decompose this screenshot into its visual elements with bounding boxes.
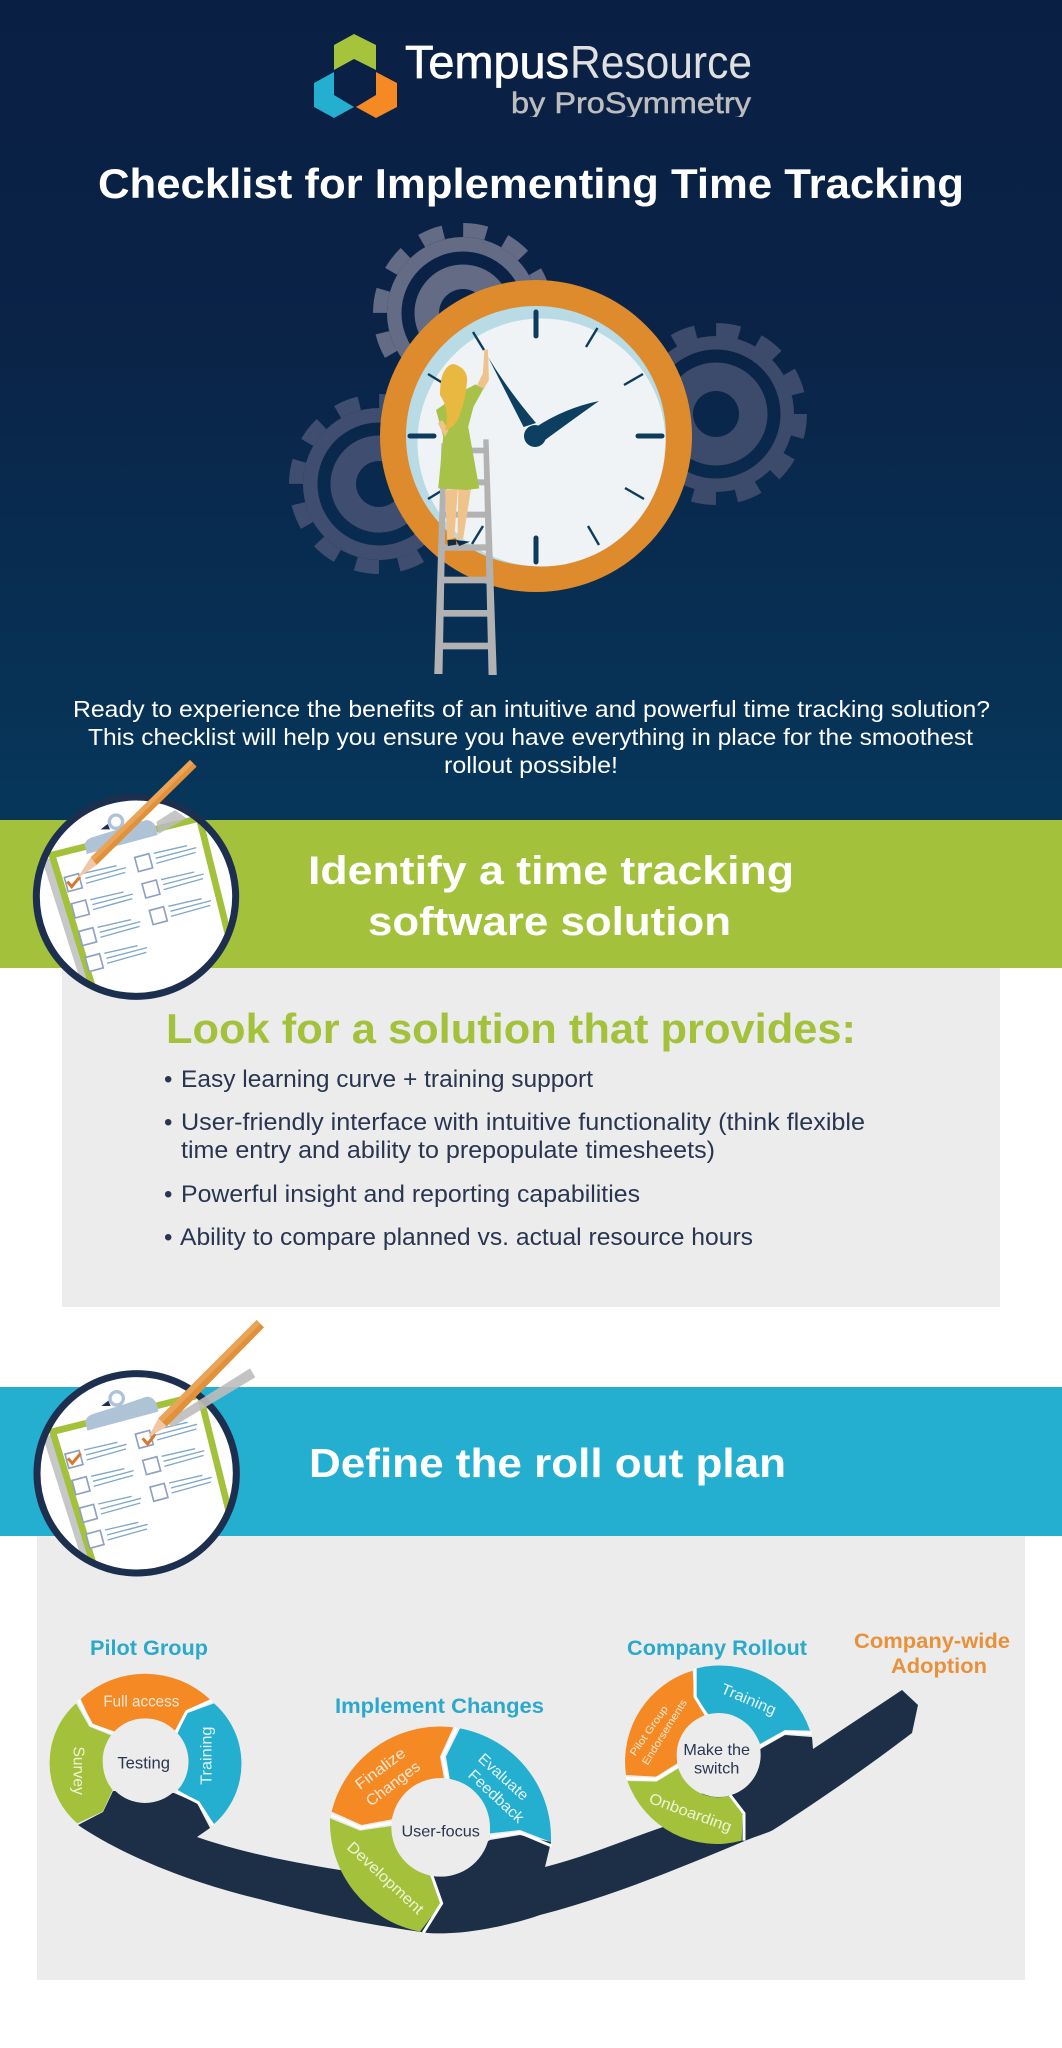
bullet list: User-friendly interface with intuitive functionality (think flexible xyxy=(181,1109,865,1136)
gear: right xyxy=(632,330,800,498)
stage: pilot group xyxy=(50,1637,241,1825)
woman xyxy=(436,349,489,546)
bullet list: time entry and ability to prepopulate timesheets) xyxy=(181,1137,715,1164)
bullet list: Easy learning curve + training support xyxy=(181,1066,593,1093)
ring: Changes xyxy=(363,1758,424,1810)
header background xyxy=(0,0,1062,820)
band heading: Define the roll out plan xyxy=(309,1440,786,1486)
stage title: Pilot Group xyxy=(90,1637,208,1660)
ring: Finalize xyxy=(352,1745,409,1793)
bullet list: • xyxy=(164,1181,172,1208)
band heading: Identify a time tracking xyxy=(308,849,794,893)
icon: clipboard with pencil 1 xyxy=(36,760,253,1063)
ring: Survey xyxy=(69,1746,86,1795)
title: Checklist for Implementing Time Tracking xyxy=(98,160,964,207)
stage title: Implement Changes xyxy=(335,1695,544,1718)
clock hour ticks xyxy=(410,312,662,562)
logo mark xyxy=(314,34,397,118)
clock xyxy=(380,280,692,592)
logo tagline: by ProSymmetry xyxy=(511,87,751,120)
logo wordmark: Tempus xyxy=(405,36,569,88)
gear: left xyxy=(296,401,462,567)
ring: Testing xyxy=(117,1754,170,1773)
ring: Development xyxy=(343,1839,427,1919)
ring: Training xyxy=(718,1681,779,1719)
bullet list: • xyxy=(164,1066,172,1093)
panel heading: Look for a solution that provides: xyxy=(166,1005,856,1052)
band heading: software solution xyxy=(368,900,731,944)
woman on ladder xyxy=(434,349,497,675)
clock minor ticks xyxy=(428,328,644,545)
ring xyxy=(50,1674,241,1825)
logo xyxy=(314,34,752,120)
bullet list: • xyxy=(164,1109,172,1136)
intro paragraph: This checklist will help you ensure you have everything in place for the smoothest xyxy=(88,724,974,750)
stage: company-wide adoption label xyxy=(854,1630,1010,1678)
intro paragraph xyxy=(73,696,990,778)
ring: Onboarding xyxy=(647,1790,734,1836)
ring: Pilot Group xyxy=(628,1704,671,1758)
clock face xyxy=(406,306,666,566)
ring: Feedback xyxy=(464,1767,527,1827)
bullet list: • xyxy=(164,1224,172,1251)
clock rim xyxy=(380,280,692,592)
panel: look for a solution xyxy=(62,968,1000,1307)
ring xyxy=(625,1665,812,1844)
stage title: Company Rollout xyxy=(627,1637,807,1660)
section band: define xyxy=(0,1387,1062,1536)
clock hands xyxy=(488,357,599,447)
intro paragraph: Ready to experience the benefits of an intuitive and powerful time tracking solution? xyxy=(73,696,990,722)
bullet list xyxy=(164,1066,865,1251)
bullet list: Ability to compare planned vs. actual resource hours xyxy=(180,1224,753,1251)
ring: Training xyxy=(199,1726,216,1785)
stage: company rollout xyxy=(625,1637,812,1844)
ring: User-focus xyxy=(401,1824,480,1841)
icon: clipboard with pencil 2 xyxy=(37,1320,264,1640)
logo wordmark second part: Resource xyxy=(570,36,752,88)
stage: company-wide adoption label: Adoption xyxy=(891,1655,987,1678)
ring: switch xyxy=(694,1760,739,1777)
panel: roll out plan xyxy=(37,1536,1025,1980)
ladder xyxy=(434,439,497,675)
stage: company-wide adoption label: Company-wide xyxy=(854,1630,1010,1653)
ring: Full access xyxy=(103,1694,180,1711)
curved path arrow xyxy=(78,1690,918,1933)
ring: Endorsements xyxy=(641,1698,690,1767)
ring xyxy=(330,1727,552,1933)
stage: implement changes xyxy=(330,1695,552,1933)
ring: Make the xyxy=(683,1742,750,1759)
ring: Evaluate xyxy=(474,1750,532,1804)
band heading xyxy=(308,849,794,944)
section band: identify xyxy=(0,820,1062,968)
gear: top xyxy=(380,230,546,396)
bullet list: Powerful insight and reporting capabilities xyxy=(181,1181,640,1208)
intro paragraph: rollout possible! xyxy=(444,752,618,778)
